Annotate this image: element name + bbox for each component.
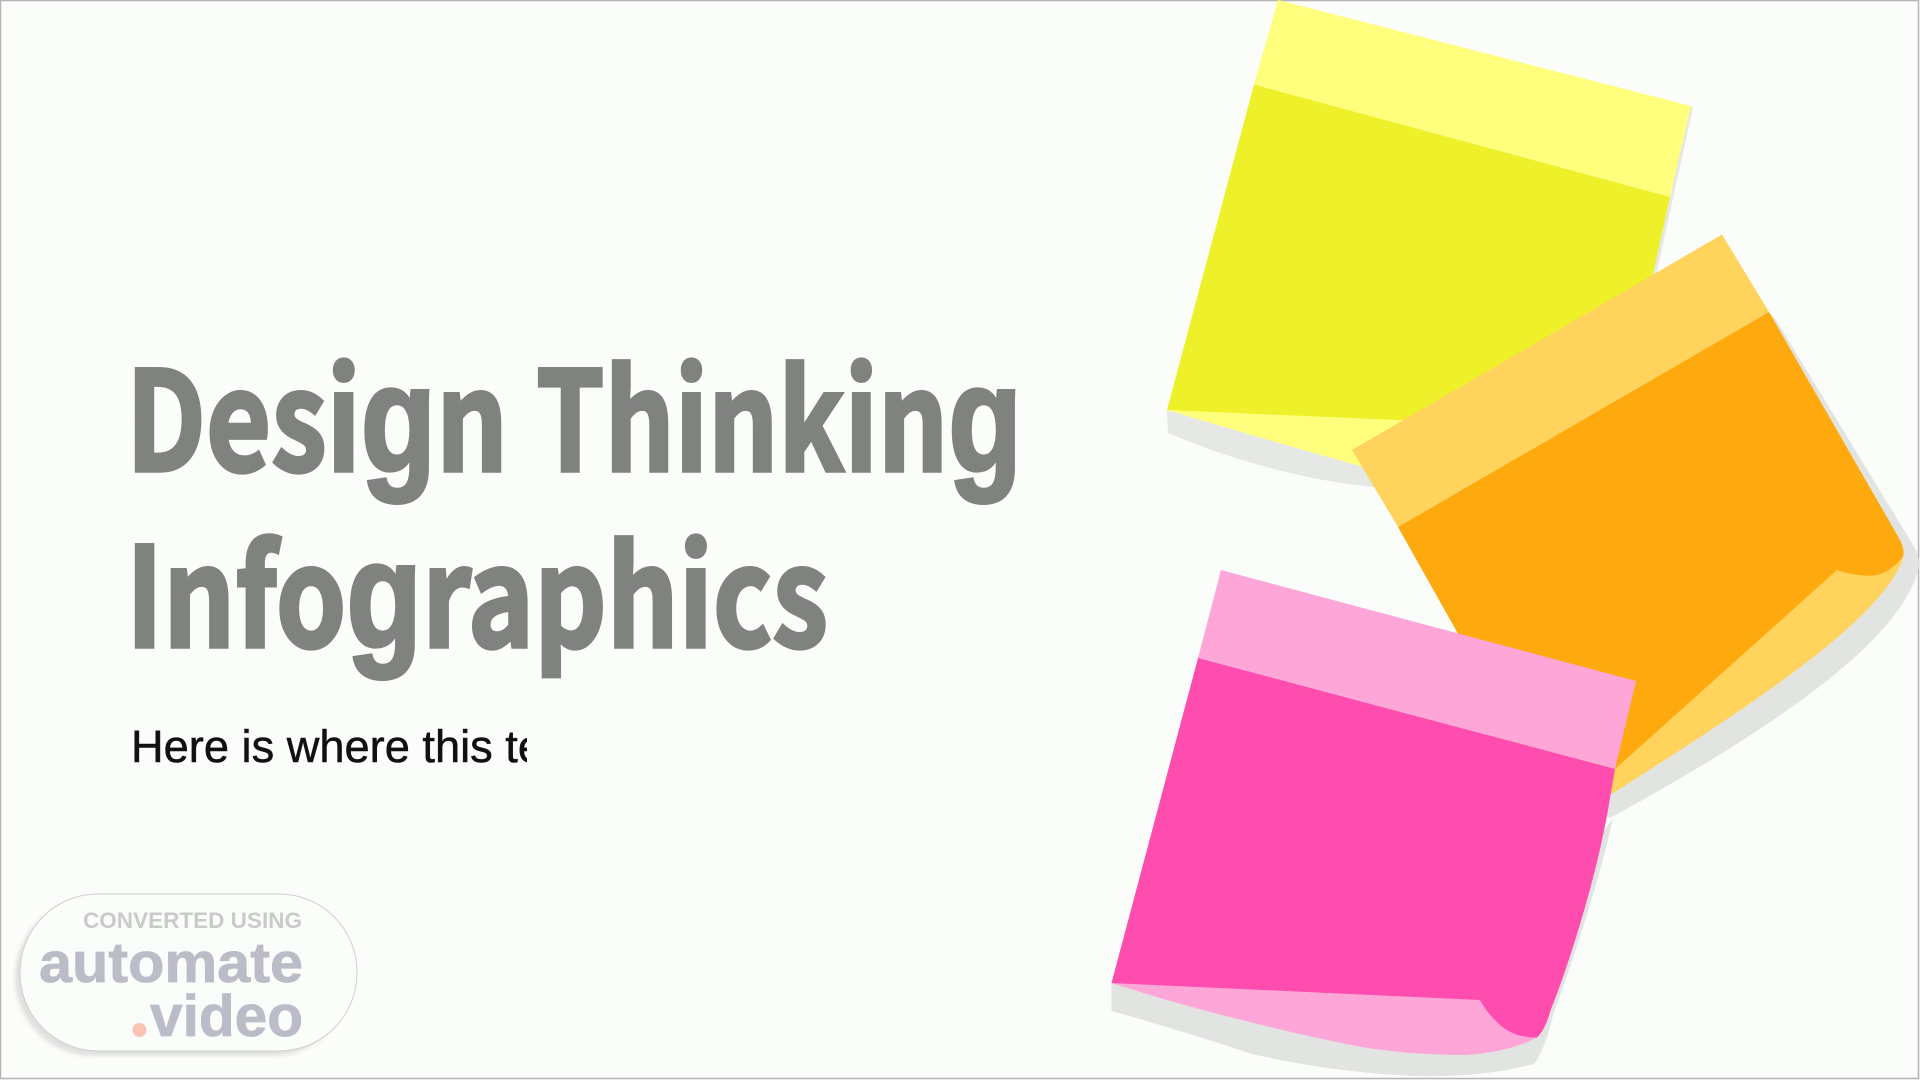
title: Infographics <box>126 487 828 687</box>
yellow note folded underside <box>1167 410 1560 490</box>
badge shadow <box>15 899 350 1056</box>
orange note body <box>1398 312 1904 770</box>
pink note shadow <box>1112 818 1613 1076</box>
orange note shadow <box>1570 312 1919 818</box>
sticky note: yellow <box>1167 0 1693 500</box>
badge caption: CONVERTED USING <box>83 908 302 933</box>
subtitle text: Here is where this te <box>131 721 543 772</box>
sticky note: orange <box>1352 234 1919 818</box>
yellow note shadow <box>1167 106 1693 500</box>
badge wordmark: automate <box>39 931 303 995</box>
pink note body <box>1112 658 1615 1038</box>
orange note top band <box>1352 234 1769 527</box>
yellow note top band <box>1254 0 1691 197</box>
title: Thinking <box>536 311 1022 511</box>
yellow note body <box>1167 84 1670 428</box>
orange note folded underside <box>1500 540 1903 795</box>
badge dot <box>132 1023 146 1037</box>
title <box>126 311 1022 687</box>
pink note folded underside <box>1112 975 1540 1055</box>
badge wordmark video: video <box>150 984 303 1049</box>
watermark badge <box>15 894 357 1056</box>
badge pill <box>20 894 357 1051</box>
sticky note: pink <box>1112 570 1636 1076</box>
title: Design <box>126 311 508 511</box>
pink note top band <box>1198 570 1636 769</box>
